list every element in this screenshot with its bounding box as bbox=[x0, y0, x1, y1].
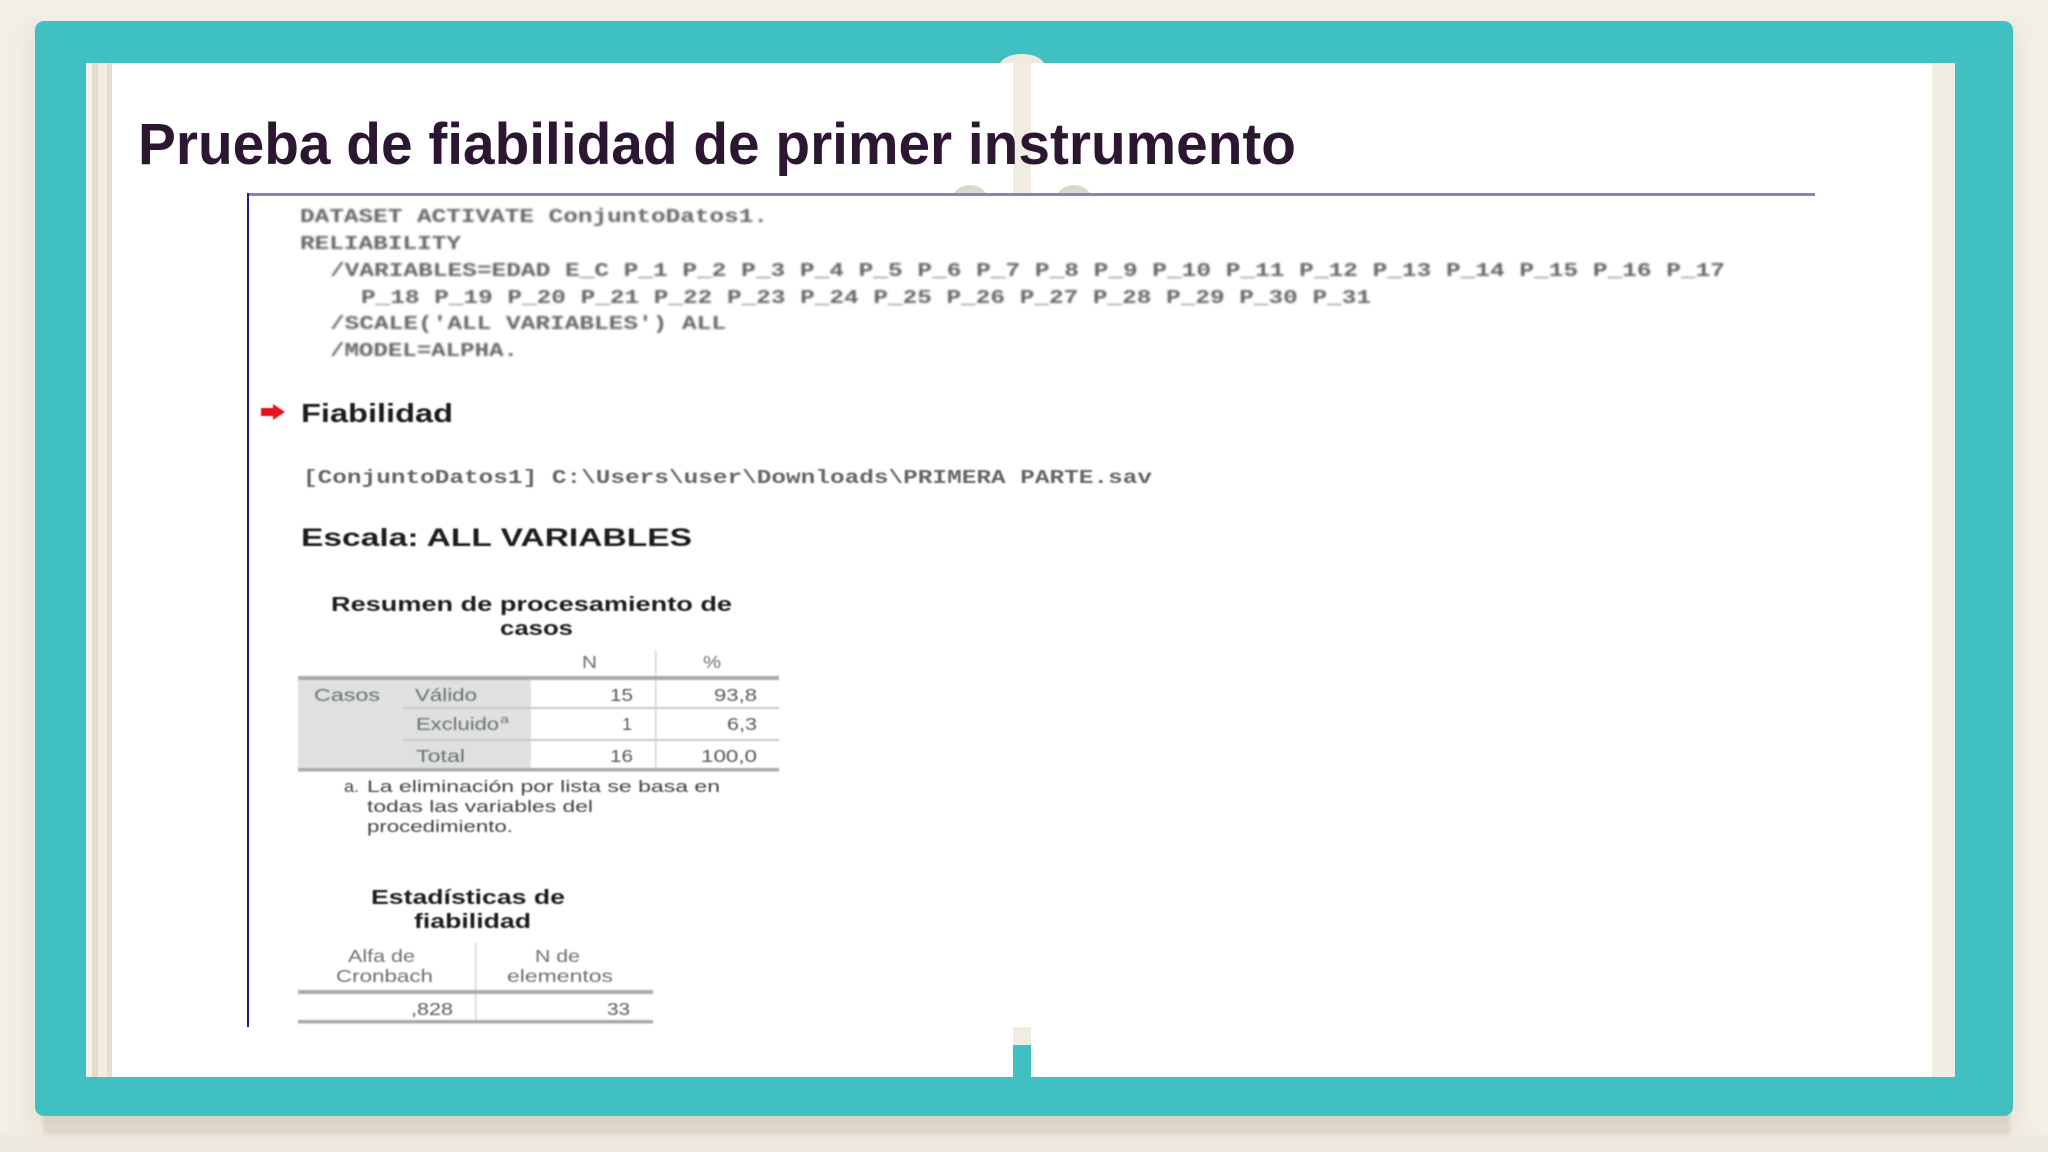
table: case processing summary bbox=[298, 593, 779, 772]
table title line 1: Resumen de procesamiento de bbox=[331, 593, 732, 616]
icon: red arrow bbox=[261, 404, 285, 420]
value 6,3: 6,3 bbox=[727, 714, 757, 734]
SPSS output screenshot bbox=[247, 193, 1815, 1027]
column divider bbox=[655, 650, 656, 770]
binding ring right bbox=[1057, 185, 1091, 211]
bottom rule bbox=[298, 768, 779, 772]
binding ring left bbox=[953, 185, 987, 211]
table title line 1: Estadísticas de bbox=[371, 886, 565, 909]
binding spine lower cream bbox=[1013, 1027, 1031, 1045]
table text bbox=[336, 886, 630, 1019]
binding tab at top bbox=[1000, 54, 1044, 63]
syntax line 3: /VARIABLES=EDAD E_C P_1 P_2 P_3 P_4 P_5 P_6 P_7 P_8 P_9 P_10 P_11 P_12 P_13 P_14 P_15 P_16 P_17 bbox=[330, 260, 1725, 282]
column divider bbox=[475, 942, 476, 1022]
footnote bbox=[344, 777, 720, 836]
bottom rule bbox=[298, 1020, 653, 1024]
heading: Escala: Escala: ALL VARIABLES bbox=[301, 524, 692, 552]
label Total: Total bbox=[416, 746, 465, 766]
file path: [ConjuntoDatos1] C:\Users\user\Downloads\PRIMERA PARTE.sav bbox=[303, 467, 1153, 489]
heading: Fiabilidad: Fiabilidad bbox=[301, 398, 453, 428]
row label shading bbox=[298, 680, 531, 770]
binding spine bbox=[1013, 63, 1031, 198]
syntax line 4: P_18 P_19 P_20 P_21 P_22 P_23 P_24 P_25 P_26 P_27 P_28 P_29 P_30 P_31 bbox=[361, 287, 1371, 309]
row rule 1 bbox=[403, 707, 779, 709]
value items: 33 bbox=[607, 999, 630, 1019]
binding spine lower teal bbox=[1013, 1045, 1031, 1078]
superscript a: a bbox=[500, 714, 510, 726]
footnote line 1: La eliminación por lista se basa en bbox=[367, 777, 720, 796]
header N: N bbox=[582, 652, 597, 672]
row rule 2 bbox=[403, 739, 779, 741]
syntax line 6: /MODEL=ALPHA. bbox=[330, 340, 518, 362]
footnote line 3: procedimiento. bbox=[367, 817, 513, 836]
label Casos: Casos bbox=[314, 685, 380, 705]
value 100,0: 100,0 bbox=[701, 746, 757, 766]
header Alfa de: Alfa de bbox=[348, 946, 415, 966]
left border bbox=[247, 193, 249, 1027]
syntax block bbox=[300, 206, 1725, 362]
header N de: N de bbox=[535, 946, 580, 966]
value 1: 1 bbox=[622, 714, 632, 734]
value 93,8: 93,8 bbox=[714, 685, 757, 705]
header Cronbach: Cronbach bbox=[336, 966, 433, 986]
table title line 2: fiabilidad bbox=[414, 910, 531, 933]
label Excluido: Excluido bbox=[416, 714, 499, 734]
footnote line 2: todas las variables del bbox=[367, 797, 593, 816]
table: reliability statistics bbox=[298, 886, 653, 1024]
syntax line 2: RELIABILITY bbox=[300, 233, 462, 255]
label Valido: Válido bbox=[415, 685, 477, 705]
top border bbox=[247, 193, 1815, 196]
left page stripes bbox=[86, 63, 112, 1077]
right page strip bbox=[1932, 63, 1955, 1077]
value alpha: ,828 bbox=[411, 999, 453, 1019]
value 15: 15 bbox=[610, 685, 633, 705]
syntax line 5: /SCALE('ALL VARIABLES') ALL bbox=[330, 313, 726, 335]
table title line 2: casos bbox=[500, 617, 573, 640]
header rule bbox=[298, 990, 653, 994]
header rule bbox=[298, 676, 779, 680]
syntax line 1: DATASET ACTIVATE ConjuntoDatos1. bbox=[300, 206, 768, 228]
header percent: % bbox=[703, 652, 721, 672]
header elementos: elementos bbox=[507, 966, 613, 986]
section headings bbox=[301, 398, 1153, 552]
value 16: 16 bbox=[610, 746, 633, 766]
screenshot background bbox=[247, 193, 1815, 1027]
title: Prueba de fiabilidad de primer instrumento bbox=[138, 112, 1296, 177]
footnote marker: a. bbox=[344, 777, 359, 796]
table text bbox=[314, 593, 757, 766]
